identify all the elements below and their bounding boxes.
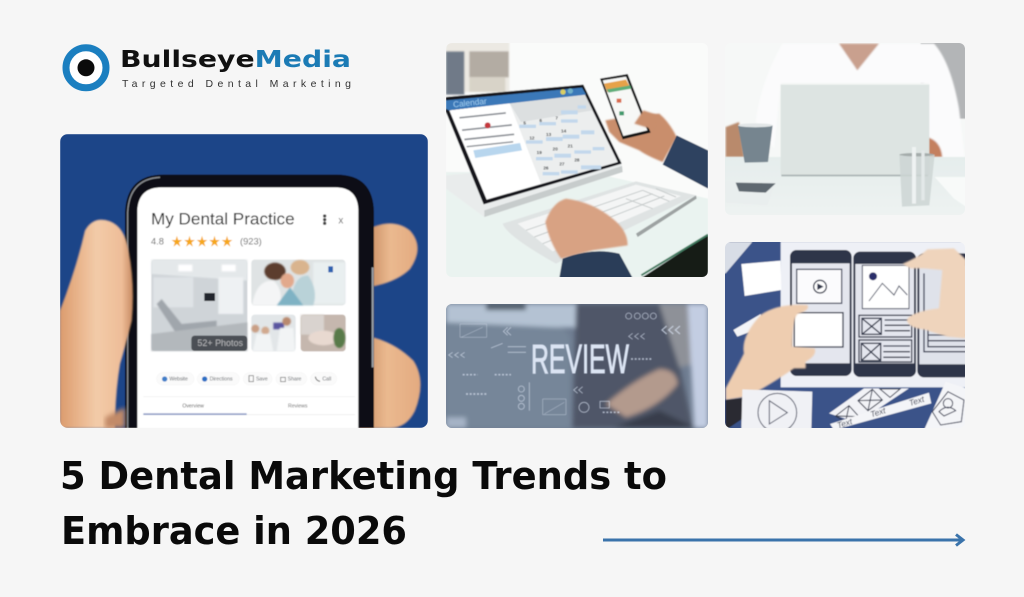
hand: right — [902, 248, 966, 338]
title line 1: 5 Dental Marketing Trends to — [60, 454, 667, 498]
thumb — [634, 110, 659, 129]
rating: ★★★★★ — [171, 233, 233, 250]
panel: person at white laptop — [724, 42, 966, 218]
phone screen — [137, 187, 358, 428]
data overlay icons — [449, 313, 680, 415]
wristband — [726, 397, 747, 430]
white shirt — [726, 44, 965, 157]
strip labels: Text — [869, 405, 887, 419]
hand holding phone — [605, 114, 677, 162]
calendar heading: Calendar — [452, 96, 487, 109]
laptop screen: 13 — [546, 132, 552, 137]
panel: phone with dental practice listing — [60, 134, 428, 428]
hand: right fingers — [360, 224, 420, 428]
laptop screen: 5 — [523, 121, 526, 126]
photo: reception — [301, 315, 346, 351]
laptop — [781, 83, 929, 176]
tabs — [142, 403, 354, 416]
note cards — [741, 261, 781, 296]
hand: left finger — [60, 220, 133, 428]
month grid — [459, 112, 514, 147]
rating: (923) — [240, 237, 262, 247]
action buttons: Directions — [210, 377, 233, 383]
laptop screen: 12 — [529, 135, 535, 140]
phone on desk — [726, 181, 776, 205]
icon: bullseye — [66, 48, 106, 88]
phone — [600, 74, 651, 139]
panel: review overlay photo — [446, 304, 708, 428]
room backdrop — [768, 145, 770, 156]
phone wireframe 1 — [790, 250, 852, 376]
papers — [935, 177, 966, 207]
listing title: My Dental Practice — [151, 209, 295, 228]
rating — [150, 236, 262, 247]
title — [60, 454, 667, 553]
tabs: Reviews — [288, 403, 308, 409]
action buttons: Website — [169, 377, 188, 383]
profile card — [924, 382, 966, 430]
sleeve on keyboard — [559, 251, 633, 278]
blue table — [724, 240, 966, 430]
keyboard — [503, 181, 697, 264]
title line 2: Embrace in 2026 — [61, 509, 407, 553]
keyboard corner — [724, 242, 752, 273]
pen holder — [899, 147, 935, 207]
action buttons: Share — [288, 377, 302, 383]
sleeve by phone — [663, 135, 708, 189]
laptop screen: 20 — [553, 147, 558, 152]
logo wordmark: Bullseye Media — [120, 47, 351, 73]
hand on keyboard — [545, 199, 628, 259]
desk — [724, 157, 966, 218]
laptop base — [592, 159, 622, 174]
office backdrop — [446, 73, 708, 189]
laptop screen: 26 — [543, 165, 549, 170]
laptop screen: 27 — [559, 161, 565, 166]
logo tagline: Targeted Dental Marketing — [122, 78, 351, 90]
laptop screen: 6 — [539, 118, 542, 123]
action buttons — [161, 374, 332, 383]
action buttons: Save — [256, 377, 268, 383]
desk — [446, 172, 708, 278]
arrow — [603, 534, 963, 546]
strip labels: Text — [908, 394, 926, 408]
schedule grid — [519, 105, 604, 175]
play card — [741, 389, 812, 432]
shelf — [446, 42, 509, 95]
menu dots and close — [323, 214, 343, 227]
mug — [738, 123, 773, 163]
strip labels — [836, 394, 926, 430]
laptop screen: 14 — [561, 129, 567, 134]
blurred backdrop — [446, 304, 708, 428]
action buttons: Call — [322, 377, 331, 383]
phone body — [125, 175, 374, 428]
phone wireframe 3 — [917, 253, 971, 377]
tabs: Overview — [182, 403, 204, 409]
paper sheet — [781, 242, 967, 387]
rating: 4.8 — [151, 237, 164, 247]
photo: dentist with family — [251, 260, 345, 305]
laptop screen: 28 — [574, 157, 580, 162]
panel: paper mobile wireframes — [724, 240, 971, 432]
hand: left — [726, 305, 815, 400]
photo: dental room — [151, 260, 247, 351]
laptop screen: 21 — [568, 143, 573, 148]
laptop screen — [446, 85, 622, 204]
laptop screen: 7 — [555, 115, 558, 120]
laptop screen: 19 — [537, 150, 542, 155]
logo — [66, 47, 351, 90]
photo backdrop — [60, 134, 428, 428]
photo count label: 52+ Photos — [197, 338, 244, 348]
phone wireframe 2 — [853, 252, 916, 377]
strip labels: Text — [836, 416, 854, 430]
desk edge — [641, 235, 708, 278]
menu dots and close: x — [338, 216, 343, 227]
photo: dental team — [251, 315, 296, 351]
REVIEW heading: REVIEW — [531, 336, 629, 382]
panel: calendar on laptop with phone — [446, 42, 708, 278]
text strips with image placeholders — [829, 388, 931, 430]
